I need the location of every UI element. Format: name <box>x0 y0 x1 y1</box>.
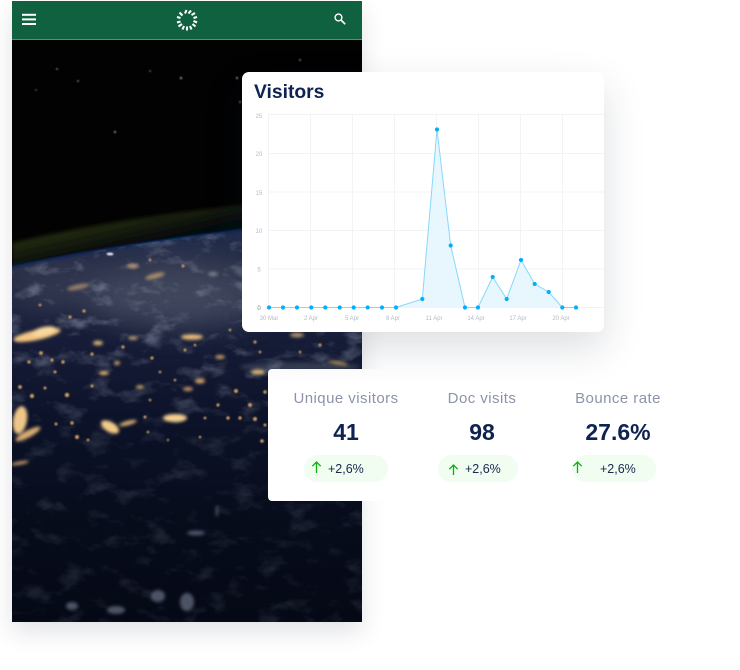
change value: +2,6% <box>600 462 636 476</box>
x axis labels: 8 Apr <box>386 316 400 322</box>
heading: Visitors: Visitors <box>254 82 324 103</box>
panel: phone screen <box>12 1 362 622</box>
city lights, small <box>18 259 322 443</box>
x axis labels: 17 Apr <box>509 316 527 322</box>
icon: up arrow <box>312 461 322 473</box>
icon: up arrow <box>448 464 458 475</box>
y axis labels: 20 <box>256 152 263 158</box>
icon: search <box>334 13 346 25</box>
x axis labels: 14 Apr <box>467 316 485 322</box>
y axis labels: 10 <box>256 229 263 235</box>
y axis labels: 5 <box>257 268 261 274</box>
icon: wreath logo <box>176 10 198 30</box>
x axis labels: 30 Mar <box>260 316 278 322</box>
panel: visitors chart card <box>242 72 604 332</box>
x axis labels: 11 Apr <box>426 316 442 322</box>
panel: stats card <box>268 369 688 501</box>
data points <box>267 127 578 310</box>
y axis labels: 15 <box>256 191 263 197</box>
stat: unique visitors <box>293 390 399 482</box>
line chart: visitors per day <box>256 114 604 322</box>
x axis labels: 2 Apr <box>304 316 318 322</box>
change pill <box>304 455 388 482</box>
x axis labels <box>260 316 570 322</box>
stat: bounce rate <box>572 390 661 482</box>
clouds <box>90 268 270 328</box>
icon: up arrow <box>572 461 582 473</box>
x axis labels: 20 Apr <box>552 316 570 322</box>
label: Bounce rate <box>575 390 661 407</box>
label: Unique visitors <box>293 390 399 407</box>
label: Doc visits <box>448 390 516 407</box>
y axis labels: 0 <box>257 306 261 312</box>
icon: hamburger menu <box>22 14 36 25</box>
change pill <box>572 455 656 482</box>
image: earth at night from orbit <box>12 58 362 622</box>
change value: +2,6% <box>328 462 364 476</box>
change pill <box>438 455 518 482</box>
faint white structures, lower part <box>66 505 218 614</box>
value: 98 <box>469 419 495 445</box>
airglow <box>12 195 362 269</box>
stat: doc visits <box>438 390 518 482</box>
data line <box>269 130 576 308</box>
area fill <box>396 130 562 308</box>
y axis labels: 25 <box>256 114 263 120</box>
change value: +2,6% <box>465 462 501 476</box>
city lights, big <box>11 248 356 466</box>
mottled surface texture <box>12 200 362 622</box>
value: 27.6% <box>585 419 651 445</box>
y axis labels <box>256 114 263 312</box>
header bar <box>12 1 362 40</box>
x axis labels: 5 Apr <box>345 316 359 322</box>
value: 41 <box>333 419 359 445</box>
